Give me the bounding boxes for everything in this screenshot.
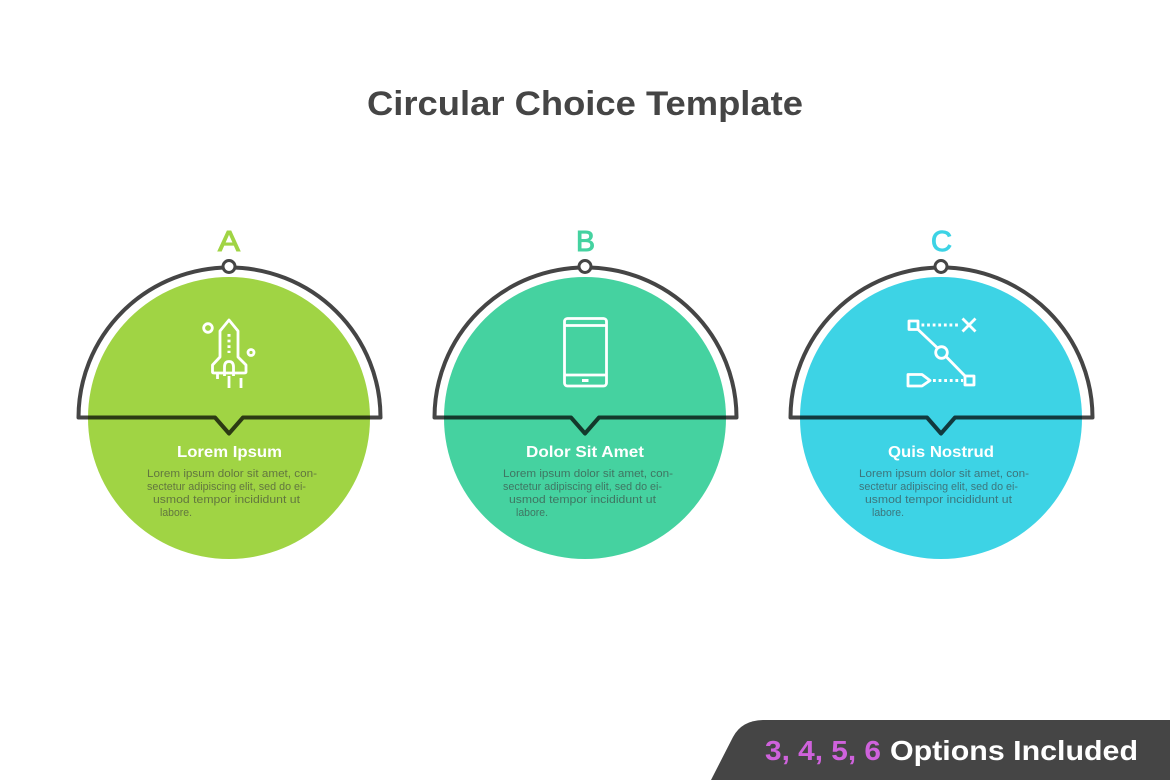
option C body text: Lorem ipsum dolor sit amet, con- bbox=[859, 468, 1029, 480]
option B semicircle outline with pointer bbox=[434, 268, 736, 434]
option C letter: C bbox=[931, 226, 952, 258]
option B body text bbox=[503, 468, 673, 519]
option A filled circle bbox=[88, 277, 370, 559]
option A body text: sectetur adipiscing elit, sed do ei- bbox=[147, 481, 306, 493]
panel: option B bbox=[434, 226, 736, 559]
option B filled circle bbox=[444, 277, 726, 559]
banner background bbox=[711, 720, 1170, 780]
icon: vector path bbox=[908, 318, 976, 386]
option C body text bbox=[859, 468, 1029, 519]
option B letter: B bbox=[576, 226, 595, 258]
panel: option A bbox=[78, 226, 380, 559]
option C body text: labore. bbox=[872, 507, 904, 519]
option C filled circle bbox=[800, 277, 1082, 559]
option C body text: usmod tempor incididunt ut bbox=[865, 494, 1012, 506]
option B body text: usmod tempor incididunt ut bbox=[509, 494, 656, 506]
option A body text bbox=[147, 468, 317, 519]
banner numbers text: 3, 4, 5, 6 bbox=[765, 735, 881, 766]
option A top node bbox=[223, 260, 235, 272]
option B heading: Dolor Sit Amet bbox=[526, 444, 644, 461]
option B top node bbox=[579, 260, 591, 272]
option A letter: A bbox=[218, 226, 240, 258]
footer banner bbox=[711, 720, 1170, 780]
banner options text: Options Included bbox=[890, 735, 1138, 766]
title: Circular Choice Template bbox=[367, 85, 803, 123]
panel: option C bbox=[790, 226, 1092, 559]
option C body text: sectetur adipiscing elit, sed do ei- bbox=[859, 481, 1018, 493]
option C heading: Quis Nostrud bbox=[888, 444, 994, 461]
option C top node bbox=[935, 260, 947, 272]
icon: rocket bbox=[204, 320, 254, 388]
option C semicircle outline with pointer bbox=[790, 268, 1092, 434]
option A body text: Lorem ipsum dolor sit amet, con- bbox=[147, 468, 317, 480]
option A semicircle outline with pointer bbox=[78, 268, 380, 434]
option A body text: labore. bbox=[160, 507, 192, 519]
icon: smartphone bbox=[564, 318, 606, 386]
option A body text: usmod tempor incididunt ut bbox=[153, 494, 300, 506]
option B body text: sectetur adipiscing elit, sed do ei- bbox=[503, 481, 662, 493]
option B body text: labore. bbox=[516, 507, 548, 519]
option A heading: Lorem Ipsum bbox=[177, 444, 282, 461]
option B body text: Lorem ipsum dolor sit amet, con- bbox=[503, 468, 673, 480]
